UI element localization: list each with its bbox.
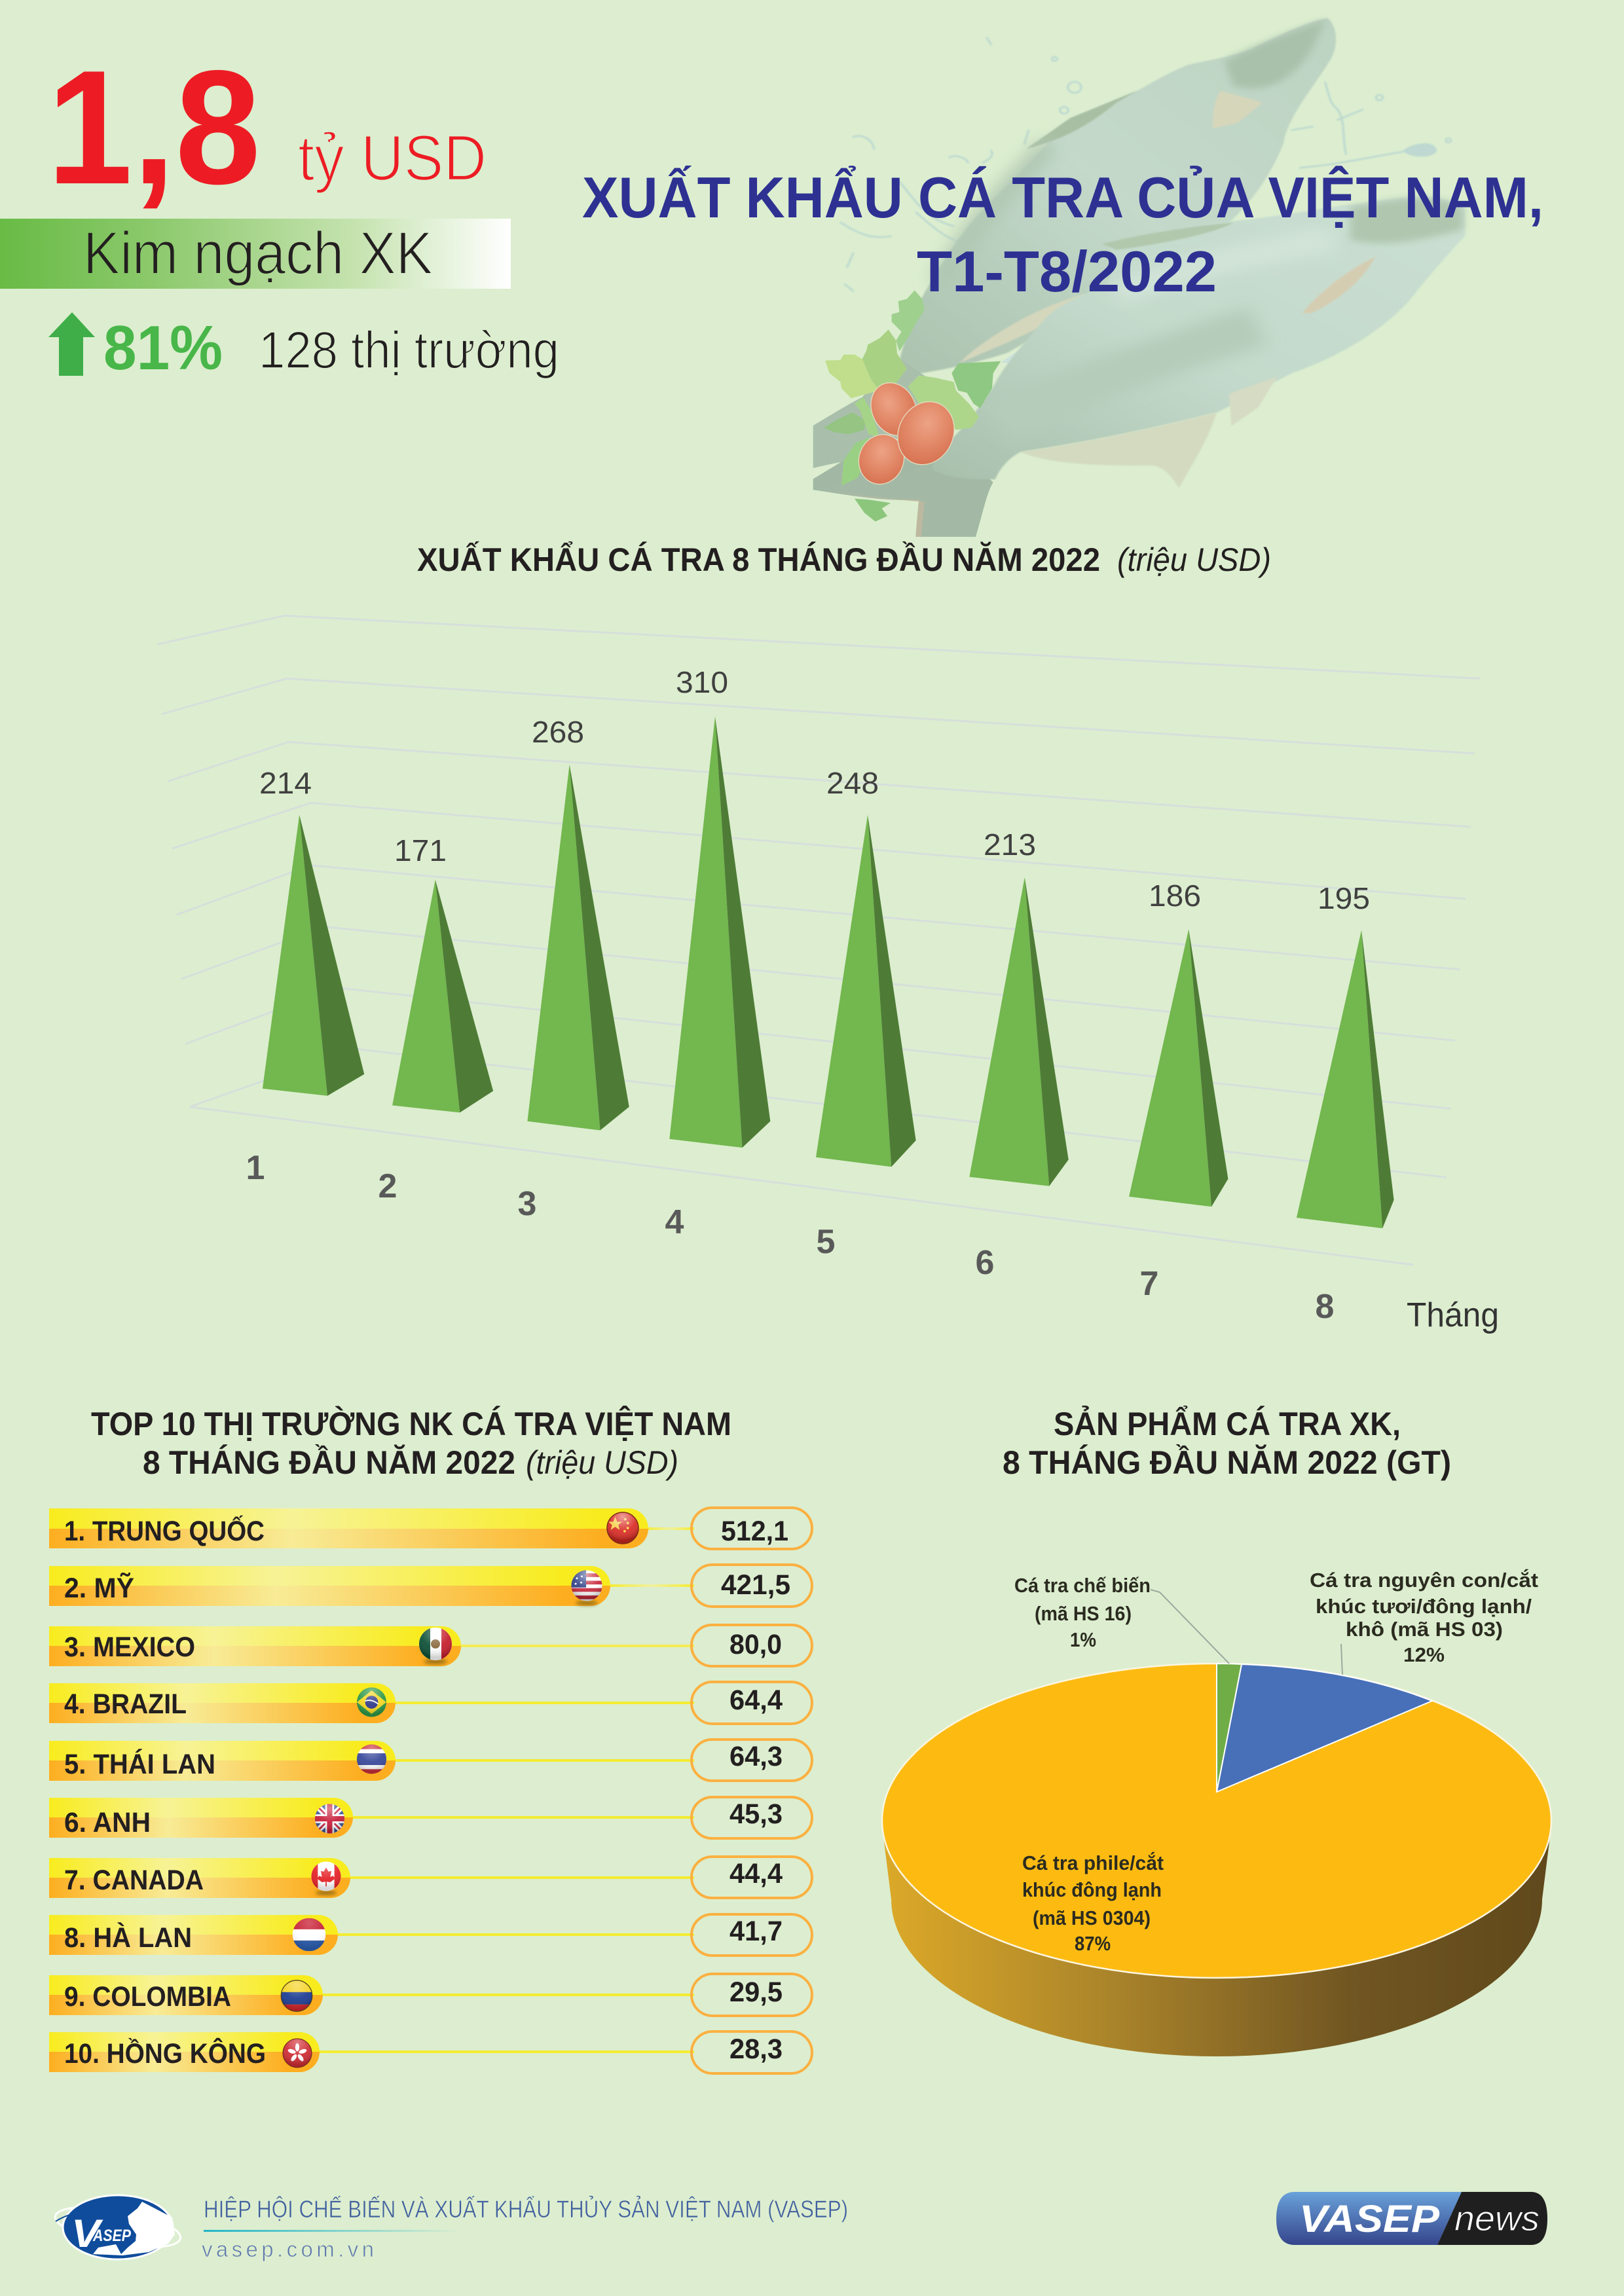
label: processed [1014, 1574, 1229, 1664]
pie side wall [883, 1836, 1550, 2056]
slice: whole/cut 12% [1217, 1664, 1432, 1792]
value: 421,5: 421,5 [721, 1569, 790, 1601]
label: processed: (mã HS 16) [1035, 1602, 1132, 1625]
month axis labels: 2 [378, 1167, 397, 1205]
3D pie chart [882, 1664, 1551, 2056]
row 1: Trung Quốc [49, 1508, 812, 1549]
slice: fillet 87% [882, 1664, 1551, 1978]
illustration: two pangasius fish with herbs and tomatoes [813, 18, 1465, 537]
value: 512,1: 512,1 [721, 1516, 788, 1547]
data labels: 268 [532, 715, 584, 749]
row 5: Thái Lan: 5. THÁI LAN [64, 1749, 215, 1780]
growth percentage: 81% [103, 313, 223, 383]
row 4: Brazil: 4. BRAZIL [64, 1688, 187, 1720]
panel heading: 8 THÁNG ĐẦU NĂM 2022 [143, 1444, 515, 1481]
data labels: 213 [984, 828, 1036, 862]
footer: organisation name and website [202, 2195, 848, 2261]
value: 28,3: 28,3 [729, 2033, 783, 2065]
row 2: Mỹ: 2. MỸ [64, 1573, 134, 1604]
label: whole fish and cuts: khô (mã HS 03) [1346, 1618, 1503, 1641]
icon: flag of Hong Kong [283, 2039, 312, 2068]
month axis labels [246, 1149, 1334, 1326]
label: fillet: Cá tra phile/cắt [1022, 1851, 1164, 1874]
value: 45,3: 45,3 [729, 1798, 783, 1830]
row 8: Hà Lan: 8. HÀ LAN [64, 1922, 192, 1954]
month axis labels: 8 [1316, 1288, 1334, 1326]
label: fillet: (mã HS 0304) [1033, 1906, 1151, 1929]
row 10: Hồng Kông: 10. HỒNG KÔNG [64, 2037, 266, 2069]
lower fish [932, 197, 1465, 488]
headline stat: 1,8 tỷ USD [47, 36, 487, 218]
data labels: 310 [676, 665, 728, 699]
month axis labels: 1 [246, 1149, 265, 1187]
month axis labels: 5 [817, 1223, 835, 1261]
footer: organisation name and website: HIỆP HỘI CHẾ BIẾN VÀ XUẤT KHẨU THỦY SẢN VIỆT NAM (VASEP) [204, 2195, 848, 2223]
icon: flag of China [607, 1512, 638, 1544]
label: fillet: khúc đông lạnh [1022, 1878, 1162, 1901]
panel: export products pie chart [882, 1406, 1551, 2056]
growth stat: up arrow, 81%, 128 markets [48, 312, 559, 383]
title [582, 165, 1543, 304]
row 3: Mexico: 3. MEXICO [64, 1631, 195, 1663]
footer: organisation name and website: vasep.com.vn [202, 2237, 374, 2261]
connector lines [317, 1527, 694, 2053]
footer: VASEP logo [52, 2195, 183, 2259]
upper fish [897, 18, 1336, 376]
icon: flag of Thailand [357, 1744, 386, 1774]
label: processed: 1% [1070, 1628, 1096, 1651]
chart heading: monthly exports: (triệu USD) [1117, 541, 1271, 578]
panel heading [1003, 1406, 1451, 1481]
row 3: Mexico [49, 1625, 812, 1666]
value: 421,5 [692, 1565, 812, 1607]
title: T1-T8/2022 [917, 239, 1217, 304]
icon: flag of Mexico [419, 1628, 452, 1664]
headline stat: 1,8 tỷ USD: tỷ USD [298, 122, 487, 194]
month axis labels: 7 [1140, 1265, 1158, 1303]
data labels: 195 [1318, 881, 1370, 915]
row 2: Mỹ [49, 1565, 812, 1607]
row 6: Anh: 6. ANH [64, 1807, 151, 1838]
value: 80,0 [692, 1625, 812, 1666]
icon: flag of USA [571, 1570, 602, 1605]
panel heading [91, 1406, 731, 1481]
row 7: Canada [49, 1857, 812, 1898]
value: 29,5 [692, 1974, 812, 2016]
row 5: Thái Lan [49, 1740, 812, 1781]
value: 64,3 [692, 1740, 812, 1781]
value: 64,4: 64,4 [729, 1685, 783, 1716]
month axis labels: 3 [518, 1185, 536, 1223]
panel: top 10 markets [49, 1406, 812, 2073]
panel heading: 8 THÁNG ĐẦU NĂM 2022 (GT) [1003, 1444, 1451, 1481]
label: whole fish and cuts: Cá tra nguyên con/cắt [1310, 1568, 1538, 1592]
panel heading: TOP 10 THỊ TRƯỜNG NK CÁ TRA VIỆT NAM [91, 1406, 731, 1442]
data labels: 186 [1149, 879, 1201, 913]
headline stat: 1,8 tỷ USD: 1,8 [47, 36, 261, 218]
row 8: Hà Lan [49, 1914, 812, 1956]
row 6: Anh [49, 1797, 812, 1838]
icon: flag of Colombia [281, 1980, 312, 2011]
axis title: Tháng [1407, 1296, 1499, 1334]
parsley leaves [824, 290, 1001, 522]
value: 41,7 [692, 1914, 812, 1956]
value: 44,4 [692, 1857, 812, 1898]
label: whole fish and cuts [1310, 1568, 1538, 1675]
label: whole fish and cuts: 12% [1403, 1643, 1445, 1666]
panel heading: (triệu USD) [526, 1444, 678, 1481]
slice: processed 1% [1217, 1664, 1242, 1792]
fish tails [813, 339, 1037, 537]
panel heading: SẢN PHẨM CÁ TRA XK, [1054, 1406, 1401, 1442]
chart gridlines [157, 615, 1480, 1265]
3D pyramid bar chart [157, 615, 1499, 1334]
footer: VASEP news badge: news [1454, 2199, 1540, 2238]
value: 80,0: 80,0 [729, 1629, 782, 1660]
value: 28,3 [692, 2032, 812, 2073]
row 1: Trung Quốc: 1. TRUNG QUỐC [64, 1515, 265, 1547]
data labels [259, 665, 1370, 915]
tomatoes [852, 375, 965, 490]
value: 64,4 [692, 1682, 812, 1724]
value: 45,3 [692, 1797, 812, 1838]
row 9: Colombia [49, 1974, 812, 2016]
label: processed: Cá tra chế biến [1014, 1574, 1151, 1597]
band: Kim ngạch XK: Kim ngạch XK [83, 220, 433, 287]
row 4: Brazil [49, 1682, 812, 1724]
pyramids for months 1 to 8 [263, 716, 1394, 1228]
value: 29,5: 29,5 [729, 1977, 783, 2008]
market count: 128 thị trường [259, 321, 559, 379]
month axis labels: 6 [976, 1244, 994, 1282]
data labels: 171 [394, 833, 447, 867]
icon: up arrow [48, 312, 95, 376]
title: XUẤT KHẨU CÁ TRA CỦA VIỆT NAM, [582, 165, 1543, 230]
data labels: 248 [826, 766, 879, 800]
row 9: Colombia: 9. COLOMBIA [64, 1981, 231, 2013]
chart heading: monthly exports: XUẤT KHẨU CÁ TRA 8 THÁNG ĐẦU NĂM 2022 [417, 541, 1100, 578]
month axis labels: 4 [665, 1203, 684, 1241]
value: 41,7: 41,7 [729, 1916, 783, 1947]
footer: VASEP logo: V [71, 2212, 103, 2255]
label: fillet [1022, 1851, 1164, 1955]
icon: flag of UK [315, 1804, 344, 1833]
row 10: Hồng Kông [49, 2032, 812, 2073]
value: 64,3: 64,3 [729, 1741, 783, 1772]
value: 512,1 [692, 1508, 812, 1549]
icon: flag of Brazil [357, 1688, 386, 1717]
footer: VASEP news badge [1276, 2192, 1547, 2245]
icon: flag of Netherlands [293, 1918, 325, 1951]
label: whole fish and cuts: khúc tươi/đông lạnh/ [1316, 1595, 1532, 1618]
data labels: 214 [259, 766, 312, 800]
row 7: Canada: 7. CANADA [64, 1865, 204, 1896]
footer: VASEP logo: ASEP [92, 2227, 131, 2245]
water splashes [841, 38, 1451, 291]
label: fillet: 87% [1075, 1932, 1111, 1955]
value: 44,4: 44,4 [729, 1858, 783, 1889]
icon: flag of Canada [312, 1862, 341, 1895]
footer: VASEP news badge: VASEP [1299, 2198, 1439, 2240]
